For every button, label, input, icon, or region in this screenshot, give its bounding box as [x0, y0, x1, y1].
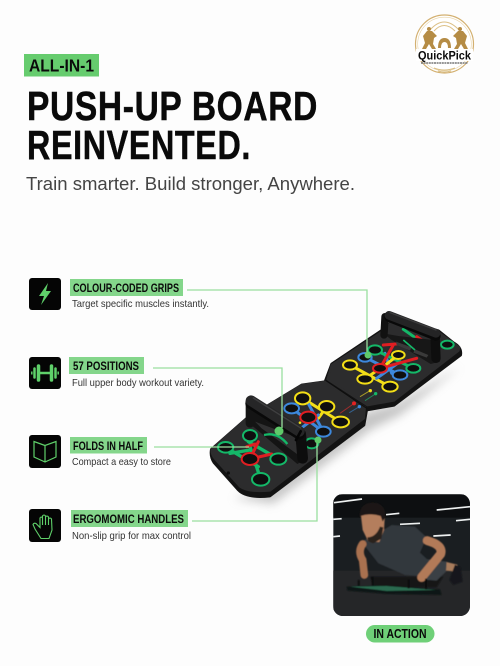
board top surface [211, 382, 365, 491]
right handle [383, 313, 440, 364]
subtitle: Train smarter. Build stronger, Anywhere. [26, 173, 355, 194]
gym ceiling lights [333, 499, 470, 537]
icon: open book [29, 435, 61, 468]
description: Target specific muscles instantly. [72, 298, 209, 310]
label: folds in half [70, 437, 147, 454]
callout dots [274, 352, 372, 444]
legs and shoe [445, 562, 457, 572]
label: colour-coded grips [70, 279, 183, 296]
right arm [422, 541, 441, 577]
icon: dumbbell [29, 357, 61, 389]
icon: hand [29, 509, 61, 542]
label: 57 positions [69, 357, 144, 374]
logo: QuickPick badge: QuickPick [418, 48, 471, 62]
grip rings [218, 341, 454, 486]
board shadow [233, 367, 460, 503]
torso [364, 524, 428, 576]
badge: in action [366, 625, 434, 642]
description: Full upper body workout variety. [72, 377, 204, 389]
title: PUSH-UP BOARD [27, 83, 318, 129]
board body [211, 323, 461, 497]
feature: colour-coded grips [29, 278, 209, 310]
left arm [360, 544, 364, 575]
feature: folds in half [29, 435, 171, 468]
product: foldable push-up board [211, 313, 461, 503]
legend marks on board [227, 389, 377, 475]
feature: ergonomic handles [29, 509, 191, 542]
label: 57 positions: 57 POSITIONS [73, 361, 139, 373]
logo: QuickPick badge [416, 15, 474, 73]
callout connector lines [153, 290, 367, 521]
icon: lightning bolt [29, 278, 61, 310]
grip links [226, 329, 427, 479]
label: ergomomic handles: ERGOMOMIC HANDLES [73, 514, 184, 526]
label: folds in half: FOLDS IN HALF [73, 441, 143, 453]
photo: man doing push-ups in a gym [333, 494, 470, 616]
description: Compact a easy to store [72, 456, 171, 468]
title: REINVENTED. [27, 122, 251, 168]
badge: ALL-IN-1: ALL-IN-1 [29, 56, 94, 76]
badge: in action: IN ACTION [374, 627, 426, 641]
mini board and handles [347, 585, 442, 595]
shadow under body [370, 577, 443, 587]
description: Non-slip grip for max control [72, 530, 191, 542]
left handle [246, 398, 307, 464]
feature: 57 positions [29, 357, 204, 389]
label: ergomomic handles [71, 510, 188, 527]
head [361, 513, 385, 542]
title [27, 83, 318, 168]
label: colour-coded grips: COLOUR-CODED GRIPS [73, 283, 179, 295]
